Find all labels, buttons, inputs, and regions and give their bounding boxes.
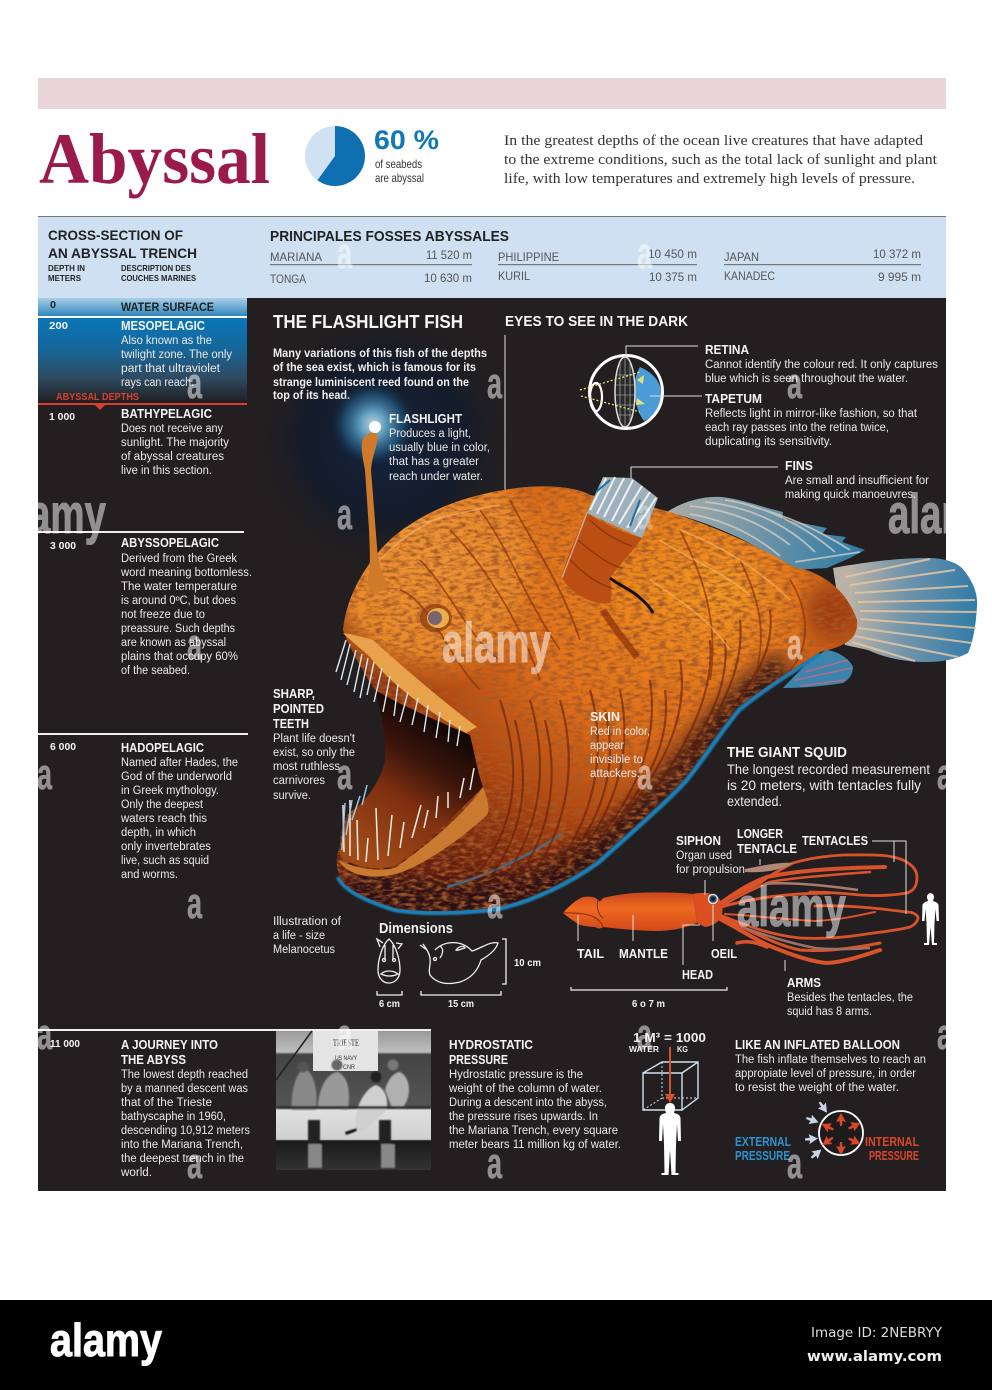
intro text: life, with low temperatures and extremely high levels of pressure. — [504, 171, 915, 187]
depth zone: hadopelagic: in Greek mythology. — [121, 785, 219, 797]
label: flashlight: FLASHLIGHT — [389, 412, 462, 426]
label: tapetum: each ray passes into the retina twice, — [705, 422, 889, 434]
depth zone: mesopelagic: 200 — [49, 320, 68, 332]
table: main abyssal trenches: 9 995 m — [878, 270, 921, 284]
section: hydrostatic pressure: meter bears 11 million kg of water. — [449, 1139, 621, 1151]
depth zone: hadopelagic: depth, in which — [121, 827, 196, 839]
stock watermarks: alamy — [0, 482, 106, 545]
section: a journey into the abyss: descending 10,912 meters — [121, 1125, 250, 1137]
stock watermarks: a — [187, 359, 202, 408]
diagram: pressure balloon: PRESSURE — [735, 1149, 790, 1163]
section: hydrostatic pressure — [448, 1038, 621, 1151]
lower lip — [338, 787, 488, 877]
label: tapetum: TAPETUM — [705, 392, 762, 406]
dimensions diagram: 10 cm — [514, 957, 541, 969]
label: tapetum: duplicating its sensitivity. — [705, 436, 832, 448]
head — [693, 893, 723, 927]
stock watermarks: alamy — [442, 611, 551, 674]
squid labels: LONGER — [737, 827, 783, 841]
stock watermarks: a — [637, 229, 652, 278]
heading: the flashlight fish: Many variations of this fish of the depths — [273, 348, 487, 360]
table: main abyssal trenches: MARIANA — [270, 250, 322, 264]
tentacles and arms — [718, 855, 918, 963]
peduncle shading — [806, 586, 858, 638]
label: sharp pointed teeth: most ruthless — [273, 761, 340, 773]
stock watermarks: a — [487, 879, 502, 928]
heading: cross-section: METERS — [48, 273, 81, 283]
squid labels: HEAD — [682, 968, 713, 982]
icon: human silhouette for squid — [922, 893, 939, 945]
heading: the flashlight fish: strange luminiscent reed found on the — [273, 377, 469, 389]
statistic: 60 percent: of seabeds — [375, 157, 422, 171]
diagram: water column cube — [629, 1030, 706, 1175]
section: hydrostatic pressure: the pressure rises upwards. In — [449, 1111, 598, 1123]
section: a journey into the abyss: by a manned descent was — [121, 1083, 248, 1095]
table: main abyssal trenches: 10 630 m — [424, 271, 472, 285]
label: sharp pointed teeth: exist, so only the — [273, 747, 355, 759]
heading: the flashlight fish: THE FLASHLIGHT FISH — [273, 312, 463, 332]
panel: light blue header — [38, 216, 946, 298]
depth zone: hadopelagic: God of the underworld — [121, 771, 232, 783]
section: like an inflated balloon: to resist the weight of the water. — [735, 1082, 899, 1094]
label: sharp pointed teeth: POINTED — [273, 702, 324, 716]
label: sharp pointed teeth: Plant life doesn't — [273, 733, 356, 745]
front teeth: blue spikes — [342, 785, 367, 850]
diagram: water column cube: KG — [677, 1044, 688, 1054]
section: like an inflated balloon: The fish inflate themselves to reach an — [735, 1054, 926, 1066]
squid length scale — [571, 987, 727, 1010]
statistic: 60 percent: 60 % — [374, 125, 439, 155]
dimensions diagram: 15 cm — [448, 998, 474, 1010]
stock watermarks: a — [637, 1010, 652, 1059]
stock watermarks: a — [187, 879, 202, 928]
lower fin — [783, 650, 853, 688]
tail fin — [833, 558, 977, 662]
section: a journey into the abyss: 11 000 — [50, 1038, 80, 1050]
abyssal depths marker: ABYSSAL DEPTHS — [56, 391, 139, 403]
heading: cross-section: AN ABYSSAL TRENCH — [48, 245, 197, 261]
label: retina: blue which is seen throughout the water. — [705, 373, 908, 385]
tentacle clubs — [745, 863, 793, 872]
depth zone: abyssopelagic: Derived from the Greek — [121, 553, 237, 565]
upper teeth — [336, 640, 460, 746]
table: main abyssal trenches: KANADEC — [724, 269, 775, 283]
table: main abyssal trenches: 11 520 m — [426, 248, 472, 262]
stock watermarks: a — [937, 1010, 952, 1059]
section: a journey into the abyss: A JOURNEY INTO — [121, 1038, 218, 1052]
diagram: pressure balloon: EXTERNAL — [735, 1135, 791, 1149]
body — [336, 486, 858, 911]
section: like an inflated balloon: appropiate level of pressure, in order — [735, 1068, 916, 1080]
dimensions diagram: 6 cm — [379, 998, 400, 1010]
section: hydrostatic pressure: During a descent into the abyss, — [449, 1097, 607, 1109]
heading: the giant squid: is 20 meters, with tentacles fully — [727, 777, 921, 793]
mantle — [563, 892, 697, 931]
label: arms: ARMS — [787, 976, 821, 990]
stock watermarks: a — [637, 750, 652, 799]
depth zone: bathypelagic: live in this section. — [121, 465, 212, 477]
depth zone: hadopelagic: only invertebrates — [121, 841, 211, 853]
depth zone: mesopelagic: rays can reach. — [121, 377, 194, 389]
diagram: water column cube: 1 M³ = 1000 — [633, 1030, 706, 1045]
table: main abyssal trenches: JAPAN — [724, 250, 759, 264]
eye diagram — [580, 346, 702, 428]
section: a journey into the abyss: the deepest trench in the — [121, 1153, 244, 1165]
label: skin: Red in color, — [590, 726, 650, 738]
label: flashlight: reach under water. — [389, 471, 483, 483]
divider above bottom section — [38, 1029, 431, 1031]
squid eye — [708, 894, 718, 904]
heading: the flashlight fish: top of its head. — [273, 390, 350, 402]
stock watermarks: a — [337, 490, 352, 539]
depth zone: abyssopelagic: 3 000 — [50, 540, 76, 552]
table: main abyssal trenches: 10 450 m — [648, 247, 697, 261]
label: sharp pointed teeth: TEETH — [273, 717, 309, 731]
section: like an inflated balloon — [735, 1038, 926, 1094]
photo: Trieste bathyscaphe crew — [276, 1031, 431, 1170]
stock watermarks: a — [937, 750, 952, 799]
diagram: pressure balloon: INTERNAL — [865, 1135, 919, 1149]
label: fins: FINS — [785, 459, 813, 473]
label: skin: attackers. — [590, 768, 640, 780]
depth zone: hadopelagic: Named after Hades, the — [121, 757, 238, 769]
caption: life-size illustration: Melanocetus — [273, 944, 335, 956]
squid length scale: 6 o 7 m — [632, 998, 665, 1010]
label: sharp pointed teeth: carnivores — [273, 775, 325, 787]
depth zone: hadopelagic: live, such as squid — [121, 855, 209, 867]
pectoral fin — [562, 477, 658, 613]
section: a journey into the abyss: THE ABYSS — [121, 1053, 186, 1067]
photo: Trieste bathyscaphe crew: TRIESTE — [333, 1038, 359, 1048]
heading: cross-section — [48, 227, 197, 283]
depth zone: mesopelagic: Also known as the — [121, 335, 212, 347]
heading: the giant squid — [727, 745, 930, 809]
label: sharp pointed teeth: survive. — [273, 790, 311, 802]
depth zone: bathypelagic — [49, 407, 229, 477]
caption: life-size illustration: Illustration of — [273, 916, 342, 928]
label: skin — [590, 710, 650, 780]
leader line: eye of fish — [446, 335, 505, 621]
heading: the giant squid: extended. — [727, 793, 782, 809]
photo: Trieste bathyscaphe crew: US NAVY — [335, 1055, 358, 1062]
depth zone: hadopelagic: Only the deepest — [121, 799, 204, 811]
depth zone: abyssopelagic: is around 0ºC, but does — [121, 595, 236, 607]
eye — [420, 604, 452, 632]
label: skin: appear — [590, 740, 624, 752]
open mouth — [340, 690, 483, 868]
depth zone: bathypelagic: sunlight. The majority — [121, 437, 229, 449]
section: a journey into the abyss: bathyscaphe in 1960, — [121, 1111, 226, 1123]
depth zone: abyssopelagic: plains that occupy 60% — [121, 651, 238, 663]
depth zone: bathypelagic: Does not receive any — [121, 423, 223, 435]
footer bar — [0, 1300, 992, 1390]
illustration: anglerfish — [290, 430, 977, 920]
label: fins — [631, 459, 929, 501]
illustration: glowing lure — [331, 382, 415, 592]
upper lip — [343, 633, 477, 733]
heading: eyes to see in the dark: EYES TO SEE IN THE DARK — [505, 313, 688, 330]
heading: the flashlight fish: of the sea exist, which is famous for its — [273, 362, 476, 374]
section: a journey into the abyss: that of the Trieste — [121, 1097, 212, 1109]
label: fins: making quick manoeuvres. — [785, 489, 916, 501]
depth zone: abyssopelagic: word meaning bottomless. — [120, 567, 252, 579]
dark belly shading — [350, 672, 790, 904]
depth zone: abyssopelagic: ABYSSOPELAGIC — [121, 536, 219, 550]
depth zone: bathypelagic: BATHYPELAGIC — [121, 407, 212, 421]
stock watermarks: a — [637, 490, 652, 539]
stock watermarks: a — [337, 229, 352, 278]
label: skin: invisible to — [590, 754, 643, 766]
panel: dark background — [38, 298, 946, 1191]
label: arms: Besides the tentacles, the — [787, 992, 913, 1004]
squid labels: TAIL — [577, 947, 604, 961]
squid labels: SIPHON — [676, 834, 721, 848]
label: skin: SKIN — [590, 710, 620, 724]
stock watermarks: a — [787, 620, 802, 669]
depth zone: mesopelagic — [49, 319, 232, 389]
stock watermarks: a — [487, 359, 502, 408]
water column gradient — [38, 298, 247, 404]
dorsal fin — [667, 497, 865, 570]
header banner — [38, 78, 946, 109]
label: retina — [705, 343, 938, 385]
depth zone: water surface: 0 — [50, 300, 56, 311]
heading: the giant squid: THE GIANT SQUID — [727, 745, 847, 761]
intro text: to the extreme conditions, such as the total lack of sunlight and plant — [504, 152, 938, 168]
diagram: pressure balloon — [735, 1099, 919, 1163]
footer bar: Image ID: 2NEBRYY — [811, 1325, 943, 1341]
footer bar: www.alamy.com — [807, 1349, 942, 1365]
depth zone: abyssopelagic — [38, 531, 252, 677]
belly blue rim — [338, 654, 820, 913]
squid labels: MANTLE — [619, 947, 668, 961]
table: main abyssal trenches: KURIL — [498, 269, 530, 283]
table: main abyssal trenches: PRINCIPALES FOSSES ABYSSALES — [270, 228, 509, 245]
depth zone: mesopelagic: MESOPELAGIC — [121, 319, 205, 333]
stock watermarks: a — [337, 750, 352, 799]
squid labels: Organ used — [676, 850, 732, 862]
intro text — [504, 133, 938, 187]
statistic: 60 percent: are abyssal — [375, 171, 424, 185]
section: hydrostatic pressure: weight of the column of water. — [448, 1083, 602, 1095]
heading: cross-section: DESCRIPTION DES — [121, 263, 191, 273]
heading: the flashlight fish — [273, 312, 487, 402]
depth zone: bathypelagic: 1 000 — [49, 411, 75, 423]
depth zone: hadopelagic: waters reach this — [120, 813, 207, 825]
squid labels: TENTACLES — [802, 834, 868, 848]
section: a journey into the abyss: into the Mariana Trench, — [121, 1139, 243, 1151]
squid labels: TENTACLE — [737, 842, 797, 856]
stock watermarks — [38, 244, 946, 1179]
label: flashlight — [389, 412, 490, 483]
depth zone: water surface — [50, 300, 214, 314]
photo: Trieste bathyscaphe crew: CNR — [343, 1065, 356, 1071]
label: tapetum: Reflects light in mirror-like fashion, so that — [705, 408, 918, 420]
diagram: pressure balloon: PRESSURE — [869, 1149, 919, 1163]
pie chart: 60% of seabeds — [305, 126, 365, 186]
section: hydrostatic pressure: HYDROSTATIC — [449, 1038, 533, 1052]
stock watermarks: alamy — [737, 875, 846, 938]
heading: the giant squid: The longest recorded measurement — [727, 761, 930, 777]
depth zone: abyssopelagic: preassure. Such depths — [121, 623, 235, 635]
diagram: water column cube: WATER — [629, 1044, 659, 1054]
muscle ribs — [480, 610, 771, 890]
illustration: giant squid — [563, 841, 918, 971]
stock watermarks: a — [37, 750, 52, 799]
title: Abyssal — [39, 119, 270, 199]
stock watermarks: a — [187, 620, 202, 669]
dimensions diagram: Dimensions — [379, 921, 453, 937]
label: tapetum — [705, 392, 918, 448]
table: main abyssal trenches: 10 375 m — [649, 270, 697, 284]
depth zone: abyssopelagic: are known as abyssal — [121, 637, 226, 649]
table: main abyssal trenches: PHILIPPINE — [498, 250, 559, 264]
stock watermarks: a — [787, 359, 802, 408]
squid labels: OEIL — [711, 947, 737, 961]
label: flashlight: Produces a light, — [389, 428, 471, 440]
caption: life-size illustration: a life - size — [273, 930, 325, 942]
stock watermarks: a — [787, 1139, 802, 1188]
label: flashlight: usually blue in color, — [389, 442, 490, 454]
caption: life-size illustration — [273, 916, 342, 956]
heading: cross-section: COUCHES MARINES — [121, 273, 196, 283]
depth zone: bathypelagic: of abyssal creatures — [121, 451, 224, 463]
depth zone: water surface: WATER SURFACE — [121, 302, 214, 314]
stock watermarks: a — [487, 1139, 502, 1188]
section: a journey into the abyss: world. — [120, 1167, 152, 1179]
label: arms: squid has 8 arms. — [787, 1006, 872, 1018]
intro text: In the greatest depths of the ocean live creatures that have adapted — [504, 133, 924, 149]
table: main abyssal trenches: TONGA — [270, 272, 306, 286]
table: main abyssal trenches: 10 372 m — [873, 247, 921, 261]
label: sharp pointed teeth — [273, 687, 356, 802]
statistic: 60 percent — [374, 125, 439, 185]
table: main abyssal trenches — [270, 228, 921, 286]
depth zone: hadopelagic: and worms. — [121, 869, 178, 881]
lower teeth — [343, 768, 474, 862]
section: a journey into the abyss — [50, 1038, 250, 1179]
depth zone: abyssopelagic: not freeze due to — [121, 609, 205, 621]
depth zone: hadopelagic: HADOPELAGIC — [121, 741, 204, 755]
stock watermarks: a — [187, 1139, 202, 1188]
depth zone: hadopelagic — [38, 733, 248, 881]
leader lines — [578, 841, 906, 971]
label: retina: RETINA — [705, 343, 749, 357]
depth zone: mesopelagic: twilight zone. The only — [121, 349, 232, 361]
dimensions diagram — [377, 921, 541, 1010]
depth zone: mesopelagic: part that ultraviolet — [121, 363, 221, 375]
section: hydrostatic pressure: the Mariana Trench, every square — [449, 1125, 618, 1137]
footer bar: alamy — [50, 1314, 162, 1366]
label: fins: Are small and insufficient for — [785, 475, 929, 487]
stock watermarks: a — [337, 1010, 352, 1059]
depth zone: abyssopelagic: The water temperature — [121, 581, 237, 593]
label: sharp pointed teeth: SHARP, — [273, 687, 315, 701]
stock watermarks: a — [37, 1010, 52, 1059]
section: like an inflated balloon: LIKE AN INFLATED BALLOON — [735, 1038, 900, 1052]
label: retina: Cannot identify the colour red. It only captures — [705, 359, 938, 371]
section: hydrostatic pressure: Hydrostatic pressure is the — [449, 1069, 583, 1081]
squid labels — [577, 827, 868, 982]
label: flashlight: that has a greater — [389, 456, 479, 468]
squid labels: for propulsion — [676, 864, 745, 876]
depth zone: hadopelagic: 6 000 — [50, 741, 76, 753]
section: hydrostatic pressure: PRESSURE — [449, 1053, 508, 1067]
section: a journey into the abyss: The lowest depth reached — [121, 1069, 248, 1081]
depth zone: abyssopelagic: of the seabed. — [121, 665, 190, 677]
label: arms — [787, 976, 913, 1018]
heading: cross-section: CROSS-SECTION OF — [48, 227, 183, 243]
heading: cross-section: DEPTH IN — [48, 263, 85, 273]
abyssal depths marker — [38, 391, 247, 410]
